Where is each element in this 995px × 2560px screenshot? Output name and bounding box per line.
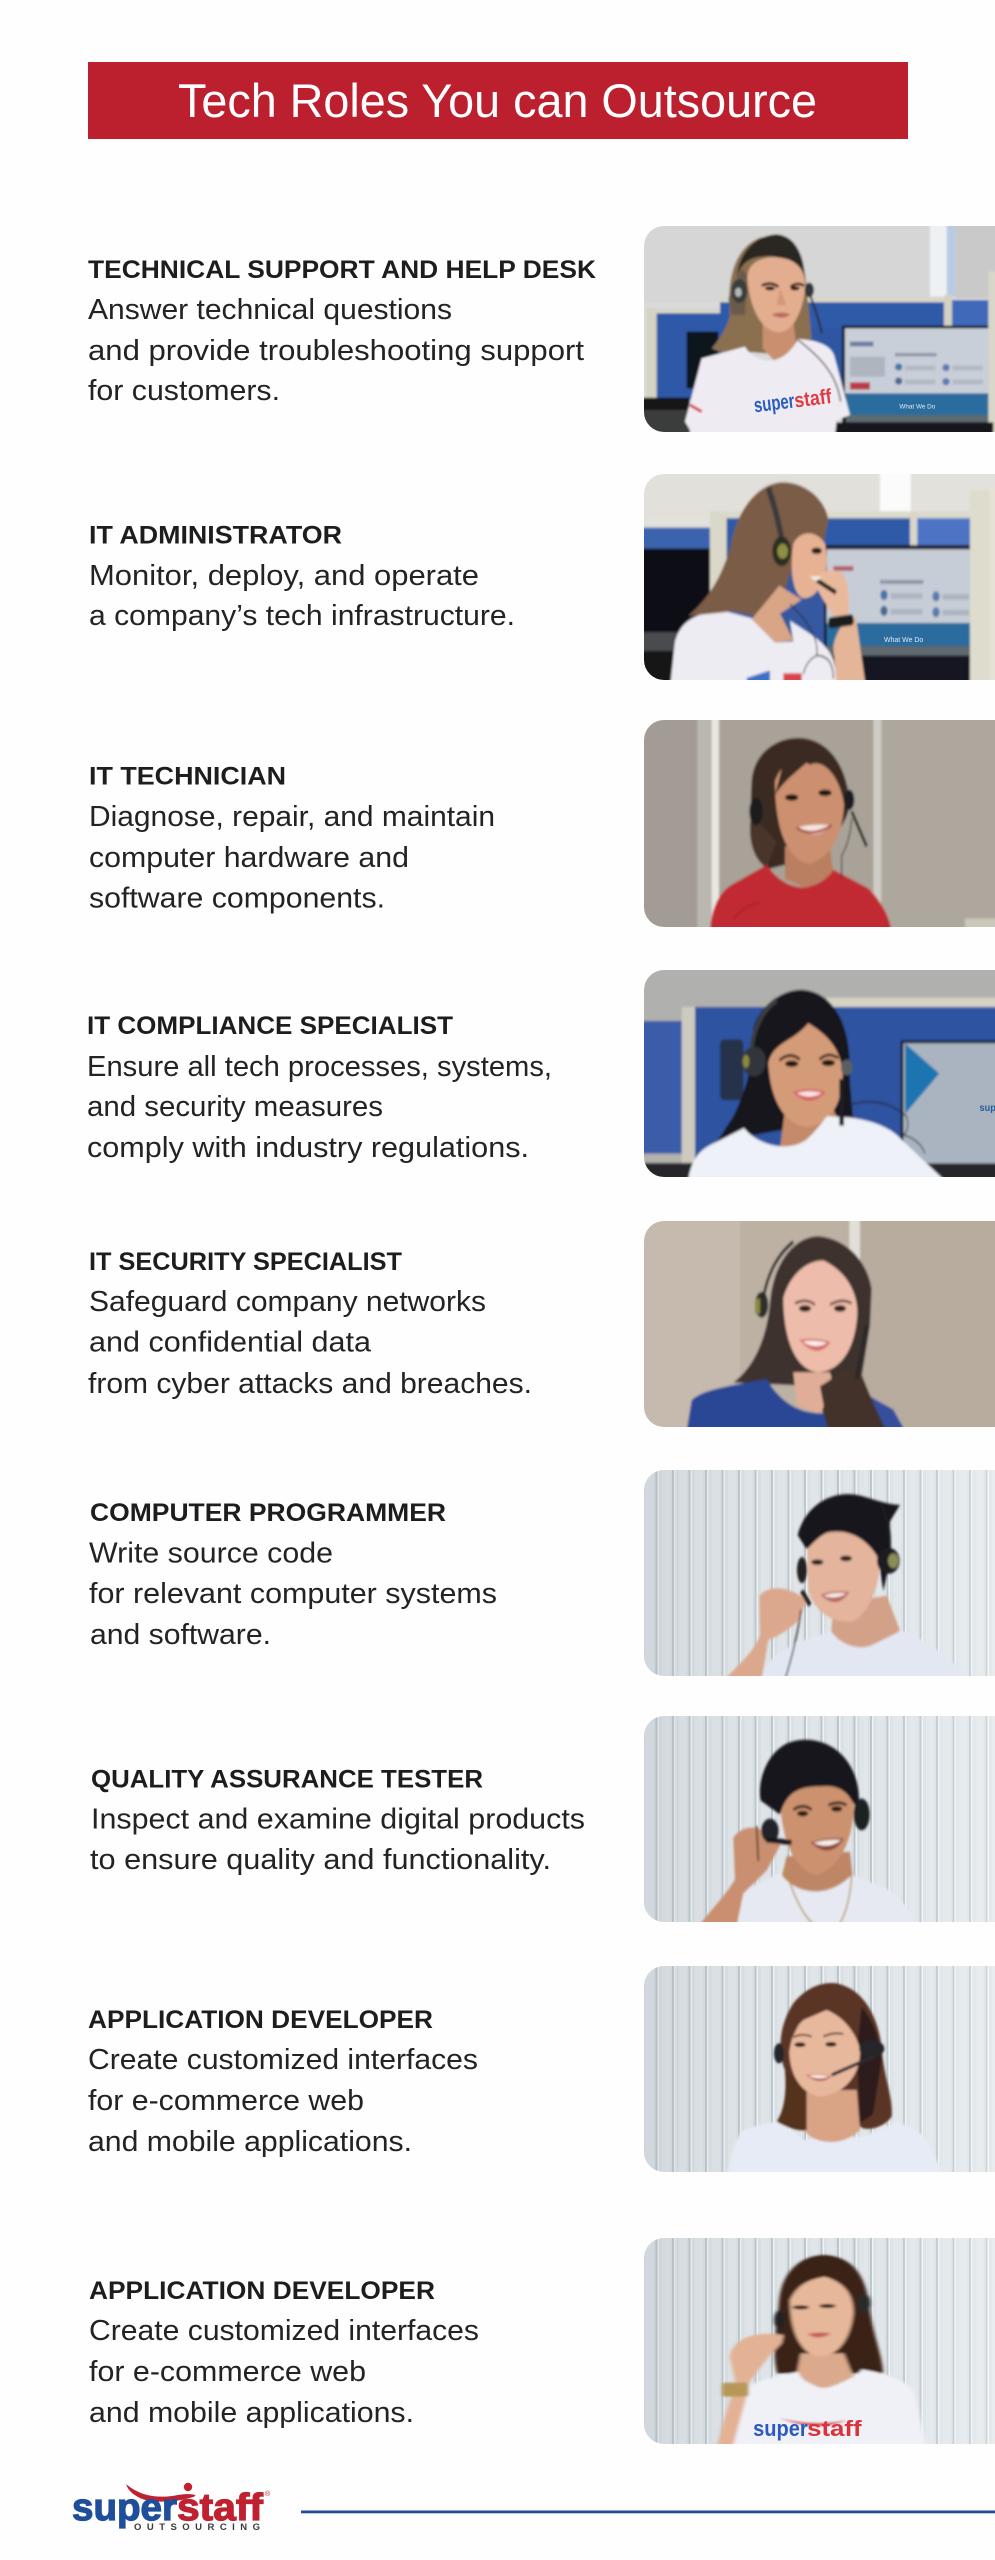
role 6 text: computer programmer: and software. — [90, 1619, 271, 1651]
photo 1: woman in white shirt at desk — [644, 226, 995, 432]
role 8 text: application developer: and mobile applications. — [88, 2126, 412, 2158]
SuperStaff logo: OUTSOURCING — [134, 2522, 260, 2533]
role 7 text: quality assurance tester — [90, 1766, 585, 1876]
role 6 text: computer programmer: Write source code — [89, 1538, 333, 1570]
role 1 text: technical support: Answer technical questions — [88, 294, 452, 326]
role 1 text: technical support — [88, 256, 596, 407]
shirt logo — [754, 388, 832, 414]
SuperStaff logo: super — [72, 2487, 177, 2529]
role 9 text: application developer: APPLICATION DEVELOPER — [89, 2277, 435, 2305]
role 8 text: application developer — [88, 2006, 478, 2158]
role 8 text: application developer: for e-commerce web — [88, 2085, 364, 2117]
photo 4: woman at blue cubicle — [644, 970, 995, 1177]
role 5 text: IT security specialist: and confidential data — [89, 1326, 372, 1358]
role 3 text: IT technician — [89, 762, 495, 914]
role 2 text: IT administrator: a company’s tech infrastructure. — [89, 600, 515, 632]
photo 5: woman in blue shirt — [644, 1221, 995, 1427]
role 7 text: quality assurance tester: Inspect and examine digital products — [91, 1804, 585, 1836]
role 5 text: IT security specialist — [88, 1248, 532, 1400]
role 9 text: application developer: Create customized interfaces — [89, 2315, 479, 2347]
SuperStaff logo — [72, 2483, 271, 2533]
role 4 text: IT compliance specialist: Ensure all tech processes, systems, — [87, 1051, 552, 1083]
photo 9: woman in SuperStaff shirt — [644, 2238, 995, 2447]
photo 2: woman in profile with headset — [644, 474, 995, 680]
role 3 text: IT technician: Diagnose, repair, and maintain — [89, 801, 495, 833]
photo 7: smiling man with necklace — [644, 1716, 995, 1926]
role 9 text: application developer: and mobile applications. — [89, 2397, 414, 2429]
photo 2: woman in profile with headset: What We Do — [884, 636, 924, 644]
role 2 text: IT administrator: Monitor, deploy, and operate — [89, 560, 479, 592]
title banner — [88, 62, 908, 139]
role 4 text: IT compliance specialist: IT COMPLIANCE SPECIALIST — [87, 1012, 453, 1040]
role 3 text: IT technician: computer hardware and — [89, 842, 409, 874]
title: Tech Roles You can Outsource — [178, 74, 817, 127]
role 7 text: quality assurance tester: QUALITY ASSURANCE TESTER — [91, 1766, 483, 1794]
photo 3: woman in red shirt — [644, 720, 995, 927]
photo 4: woman at blue cubicle: sup — [979, 1102, 995, 1113]
photo 8: woman with brown bob hair — [644, 1966, 995, 2177]
role 8 text: application developer: APPLICATION DEVELOPER — [88, 2006, 433, 2034]
role 2 text: IT administrator — [89, 522, 515, 632]
role 5 text: IT security specialist: from cyber attacks and breaches. — [88, 1368, 532, 1400]
role 7 text: quality assurance tester: to ensure quality and functionality. — [90, 1844, 551, 1876]
footer rule — [301, 2510, 995, 2513]
SuperStaff logo: ® — [265, 2490, 271, 2498]
photo 6: man touching headset mic — [644, 1470, 995, 1679]
shirt logo: staff — [807, 2417, 862, 2441]
role 1 text: technical support: for customers. — [88, 375, 280, 407]
role 6 text: computer programmer: COMPUTER PROGRAMMER — [90, 1499, 446, 1527]
role 4 text: IT compliance specialist — [87, 1012, 552, 1164]
SuperStaff logo: staff — [177, 2487, 263, 2529]
role 1 text: technical support: and provide troubleshooting support — [88, 335, 584, 367]
role 1 text: technical support: TECHNICAL SUPPORT AND HELP DESK — [88, 256, 596, 284]
role 6 text: computer programmer: for relevant computer systems — [89, 1578, 497, 1610]
role 9 text: application developer — [89, 2277, 479, 2429]
role 4 text: IT compliance specialist: and security measures — [87, 1091, 383, 1123]
shirt logo: staff — [793, 385, 833, 412]
role 8 text: application developer: Create customized interfaces — [88, 2044, 478, 2076]
logo swoosh — [126, 2484, 195, 2502]
role 5 text: IT security specialist: Safeguard company networks — [89, 1286, 486, 1318]
shirt logo: super — [753, 390, 796, 417]
role 3 text: IT technician: IT TECHNICIAN — [89, 762, 286, 790]
role 4 text: IT compliance specialist: comply with industry regulations. — [87, 1132, 529, 1164]
role 3 text: IT technician: software components. — [89, 882, 385, 914]
logo dot — [184, 2483, 192, 2491]
role 9 text: application developer: for e-commerce web — [89, 2356, 366, 2388]
role 6 text: computer programmer — [89, 1499, 497, 1651]
role 2 text: IT administrator: IT ADMINISTRATOR — [89, 522, 342, 550]
photo 1: woman in white shirt at desk: What We Do — [899, 403, 936, 410]
role 5 text: IT security specialist: IT SECURITY SPECIALIST — [89, 1248, 402, 1276]
shirt logo: super — [753, 2417, 808, 2441]
